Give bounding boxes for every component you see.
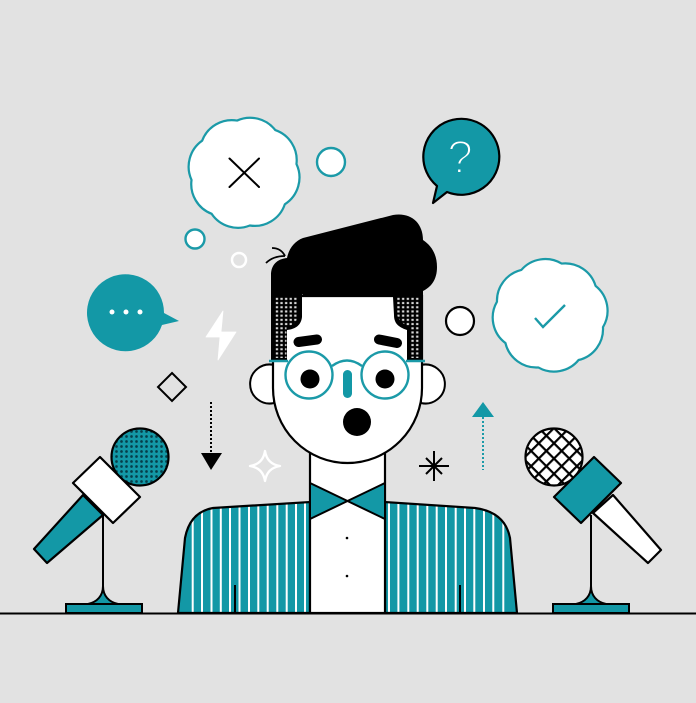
thought cloud with X: [189, 118, 299, 228]
sparkle: [250, 451, 280, 481]
hair strands: [266, 248, 285, 263]
shirt and neck: [310, 450, 385, 613]
illustration: surprised man at press microphones: [0, 116, 696, 614]
asterisk: [419, 451, 449, 481]
nose: [343, 370, 352, 398]
hair: [271, 214, 437, 361]
diamond: [158, 373, 186, 401]
ears: [250, 364, 445, 403]
jacket right: [385, 500, 517, 613]
black outlined circle: [446, 307, 474, 335]
lightning bolt: [206, 311, 236, 360]
sideburn dots left: [275, 297, 298, 358]
white ring: [232, 253, 246, 267]
eyebrows: [298, 340, 397, 343]
bow tie: [310, 483, 385, 519]
right microphone: [526, 428, 661, 613]
jacket left: [178, 500, 310, 613]
check cloud: [493, 259, 608, 372]
teal thought bubbles: [186, 148, 345, 248]
down arrow: [201, 402, 222, 470]
question speech bubble: ?: [447, 131, 473, 183]
glasses: [269, 352, 425, 398]
ellipsis speech bubble: [87, 274, 179, 351]
left microphone: [34, 428, 168, 613]
up arrow: [472, 402, 494, 470]
face: [273, 296, 422, 463]
mouth: [343, 408, 371, 436]
eyes: [300, 370, 394, 388]
ground line: [0, 612, 696, 614]
question speech bubble: [423, 119, 499, 203]
sideburn dots right: [397, 297, 420, 358]
